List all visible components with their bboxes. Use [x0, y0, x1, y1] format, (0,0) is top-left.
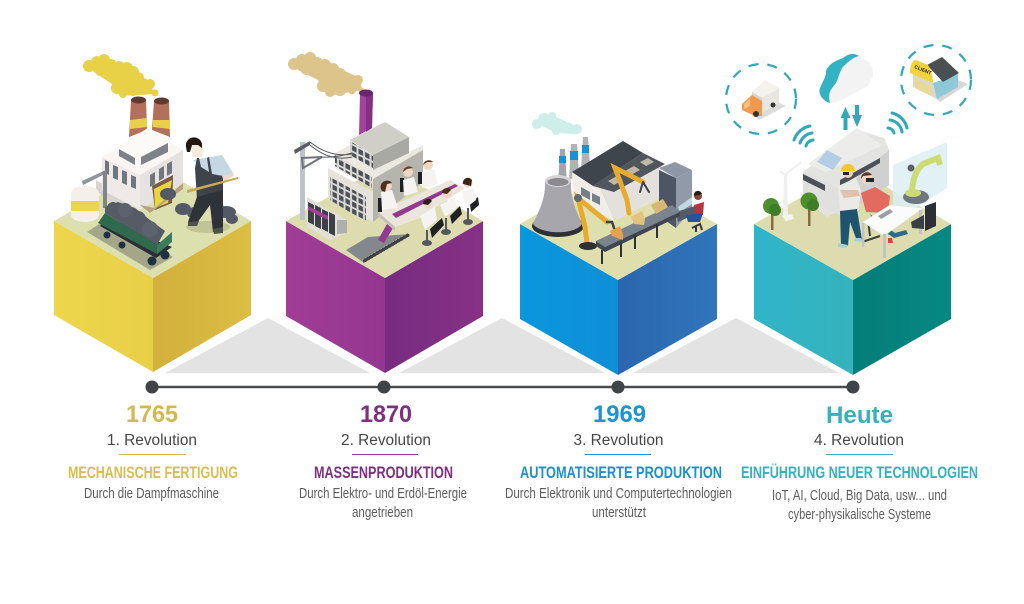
icon: engineer with helmet: [838, 164, 863, 248]
icon: robot arms: [574, 168, 649, 250]
text block: 4. Revolution: [741, 402, 978, 523]
text block: 2. Revolution: angetrieben: [352, 505, 413, 521]
icon: yellow smoke cloud: [83, 54, 158, 98]
icon: screen with robot arm: [893, 142, 947, 222]
text block: 1. Revolution: 1765: [126, 401, 178, 428]
icon: pale blue cloud: [532, 112, 582, 135]
panel: cube 2: [286, 165, 483, 373]
icon: cooling tower: [532, 175, 584, 237]
icon: operator at desk: [676, 191, 704, 232]
panel: cube 4: [754, 168, 951, 375]
icon: transformers: [307, 197, 347, 240]
icon: up and down arrows: [840, 105, 862, 130]
icon: automated factory hall: [572, 141, 665, 222]
icon: coal wagon: [87, 202, 173, 270]
icon: utility pole: [294, 141, 352, 220]
text block: 1. Revolution: [68, 401, 238, 502]
icon: conveyor belt: [596, 205, 680, 264]
icon: control cabinet: [659, 162, 692, 228]
panel: cube 1: [54, 165, 251, 372]
gray connector triangles: [165, 318, 839, 373]
icon: VR headset user: [861, 172, 908, 243]
icon: twin chimneys: [129, 96, 170, 137]
icon: wifi signal left: [794, 126, 813, 146]
icon: steam factory: [96, 128, 183, 213]
text block: 2. Revolution: 2. Revolution: [341, 432, 431, 449]
icon: parts crates: [610, 199, 668, 240]
icon: cloud: [819, 53, 873, 103]
panel: cube 3: [520, 168, 717, 375]
text block: 2. Revolution: 1870: [360, 401, 412, 428]
text block: 3. Revolution: AUTOMATISIERTE PRODUKTION: [520, 463, 722, 482]
text block: 2. Revolution: Durch Elektro- und Erdöl-Energie: [299, 486, 467, 502]
icon: delivery truck in dashed circle: [726, 64, 796, 134]
icon: assembly line and conveyor: [346, 215, 410, 263]
text block: 3. Revolution: 3. Revolution: [574, 432, 664, 449]
text block: 2. Revolution: [299, 401, 467, 521]
icon: storage tank with pipe: [71, 170, 107, 222]
icon: client warehouse in dashed circle: CLIENT: [913, 64, 932, 77]
text block: 3. Revolution: Durch Elektronik und Computertechnologien: [505, 486, 732, 502]
text block: 1. Revolution: MECHANISCHE FERTIGUNG: [68, 463, 238, 482]
text block: 4. Revolution: 4. Revolution: [814, 432, 904, 449]
timeline: [146, 380, 860, 394]
icon: smart building: [803, 128, 889, 217]
icon: multi-storey factory: [328, 122, 423, 222]
icon: wifi signal right: [888, 113, 907, 133]
text block: 3. Revolution: unterstützt: [592, 505, 646, 521]
text block: 2. Revolution: MASSENPRODUKTION: [314, 463, 453, 482]
text block: 1. Revolution: 1. Revolution: [107, 432, 197, 449]
icon: two trees: [763, 192, 819, 230]
text block: 3. Revolution: [505, 401, 732, 521]
icon: worker with shovel: [186, 137, 238, 234]
icon: work table: [378, 180, 465, 231]
icon: tan smoke cloud: [288, 52, 365, 97]
text block: 4. Revolution: IoT, AI, Cloud, Big Data, usw... und: [772, 488, 947, 504]
text block: 4. Revolution: cyber-physikalische Systeme: [788, 507, 931, 523]
icon: workers at the table: [378, 160, 479, 246]
icon: purple chimney: [359, 90, 373, 135]
text block: 3. Revolution: 1969: [593, 401, 646, 428]
text block: 4. Revolution: Heute: [826, 402, 893, 429]
text block: 1. Revolution: Durch die Dampfmaschine: [84, 486, 219, 502]
icon: client warehouse in dashed circle: [901, 45, 971, 115]
icon: coal pile: [160, 188, 238, 224]
icon: wind turbine: [780, 162, 801, 221]
icon: desk with computer: [862, 202, 936, 258]
icon: three stacks: [558, 137, 590, 185]
